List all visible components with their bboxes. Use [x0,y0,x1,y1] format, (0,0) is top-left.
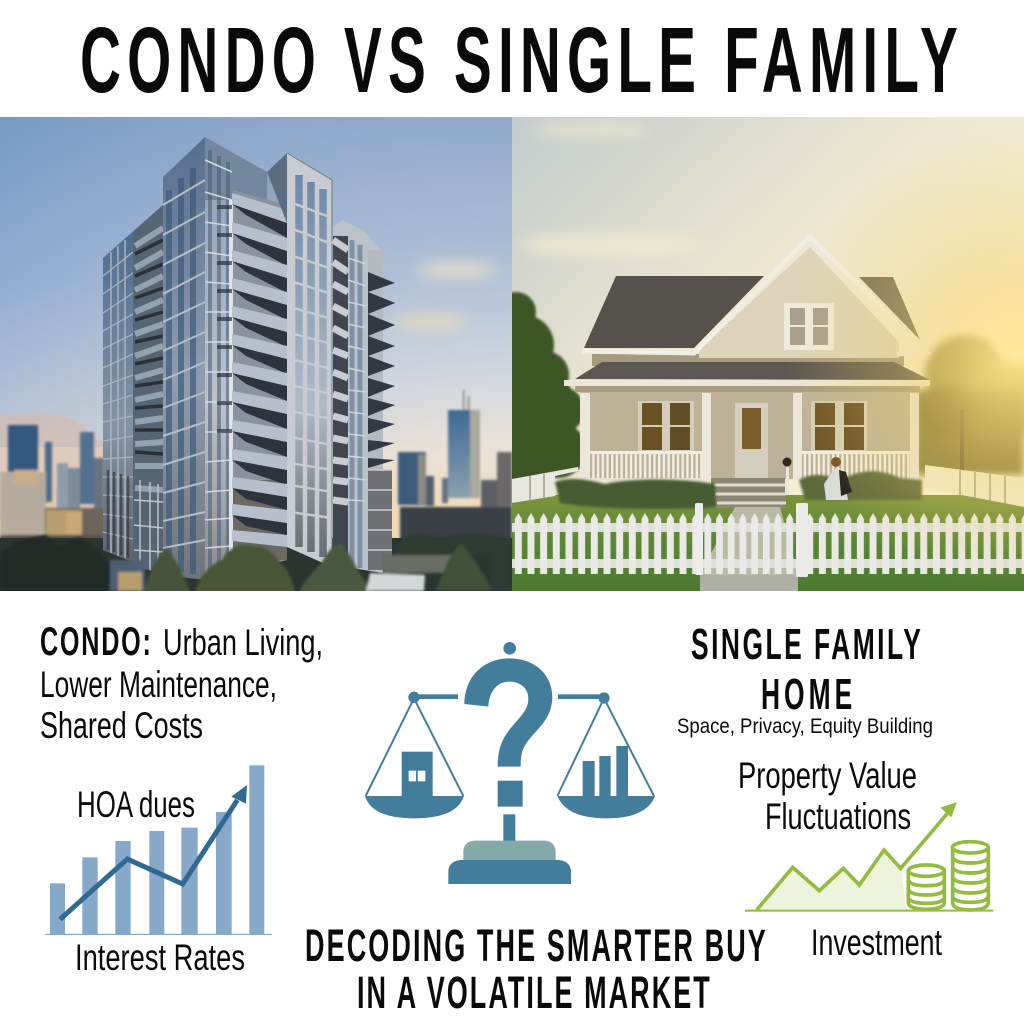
door [735,403,768,478]
chart: investment growth with coins [745,802,993,911]
text block: condo features: Urban Living, [163,622,323,663]
left porch window [638,401,694,451]
upper roof [584,276,764,348]
trees [488,292,1024,486]
porch columns [580,393,919,480]
walkway [700,507,798,591]
ground [0,538,512,591]
side fences [512,465,1024,507]
text block: single family home [677,619,933,738]
trend arrow [60,785,247,919]
building: right wing [333,220,395,573]
balcony glass [232,193,287,547]
text block: condo features [40,620,323,746]
text block: condo features: CONDO: [40,620,151,665]
gable window [784,303,834,350]
chart bars [50,765,264,934]
porch railings [590,451,910,481]
skyline: right [398,390,512,542]
sun glow [802,153,1024,574]
building: light tower face [267,153,332,567]
gable trim [582,237,926,354]
text block: condo features: Lower Maintenance, [40,664,277,705]
label: property value fluctuations [738,755,917,837]
label: property value fluctuations: Property Value [738,755,917,796]
porch roof [575,362,930,380]
text block: single family home: Space, Privacy, Equity Building [677,715,933,738]
icon: balance scale with question mark [365,642,655,884]
building: left wing [103,205,163,575]
large coin stack [952,842,988,910]
shrubs [555,471,922,509]
balcony undersides [232,204,287,535]
label: investment: Investment [811,922,943,963]
right scale pan with bars [557,692,655,818]
label: property value fluctuations: Fluctuations [765,796,911,837]
question mark [464,642,552,807]
skyline: left [0,423,103,538]
stand [448,814,571,884]
subtitle: DECODING THE SMARTER BUY [305,920,766,971]
trees and ground [0,534,512,595]
building: centre faces [163,137,287,580]
left scale pan with house [365,692,464,818]
text block: single family home: SINGLE FAMILY [691,619,921,669]
picket fence [512,503,1024,577]
bar chart: HOA dues and interest rates [45,765,272,934]
label: HOA dues: HOA dues [77,784,195,825]
small coin stack [908,865,944,909]
lawn [512,495,1024,591]
title: CONDO VS SINGLE FAMILY [80,9,958,113]
text block: single family home: HOME [761,669,852,719]
label: interest rates: Interest Rates [75,937,245,978]
gable siding [699,247,899,358]
panel: condo photo [0,117,512,595]
right porch window [811,401,867,451]
steps [711,478,786,508]
growth arrow [757,802,957,910]
people on the porch [782,457,852,500]
text block: condo features: Shared Costs [40,705,203,746]
subtitle [305,920,766,1018]
value area [757,850,907,910]
house body [564,237,930,508]
subtitle: IN A VOLATILE MARKET [357,967,710,1018]
panel: house photo [488,117,1024,591]
